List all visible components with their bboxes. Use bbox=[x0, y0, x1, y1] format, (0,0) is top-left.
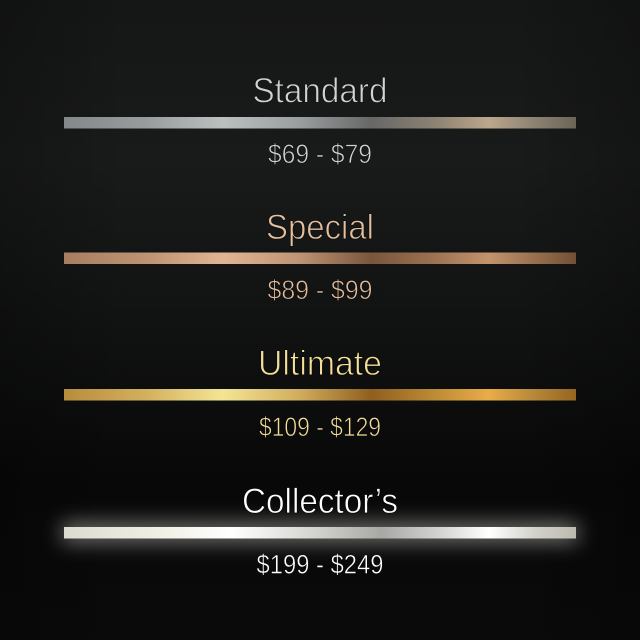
panel: standard tier bbox=[64, 72, 576, 169]
heading: Ultimate: Ultimate bbox=[258, 344, 382, 383]
price: standard: $69 - $79 bbox=[268, 139, 372, 169]
bar: gold gradient bbox=[64, 389, 576, 400]
panel: collector's tier bbox=[62, 482, 578, 580]
panel: ultimate tier bbox=[64, 344, 576, 442]
panel: special tier bbox=[64, 208, 576, 305]
heading: Standard: Standard bbox=[252, 72, 388, 110]
bar: silver gradient bbox=[64, 117, 576, 128]
price: special: $89 - $99 bbox=[268, 275, 372, 305]
price: ultimate: $109 - $129 bbox=[259, 412, 381, 442]
bar glow bbox=[62, 523, 578, 542]
heading: Special: Special bbox=[266, 208, 374, 247]
price: collector's: $199 - $249 bbox=[256, 550, 384, 580]
bar: platinum gradient bbox=[64, 527, 576, 538]
bar: bronze gradient bbox=[64, 252, 576, 264]
heading: Collector's: Collector’s bbox=[242, 482, 398, 521]
